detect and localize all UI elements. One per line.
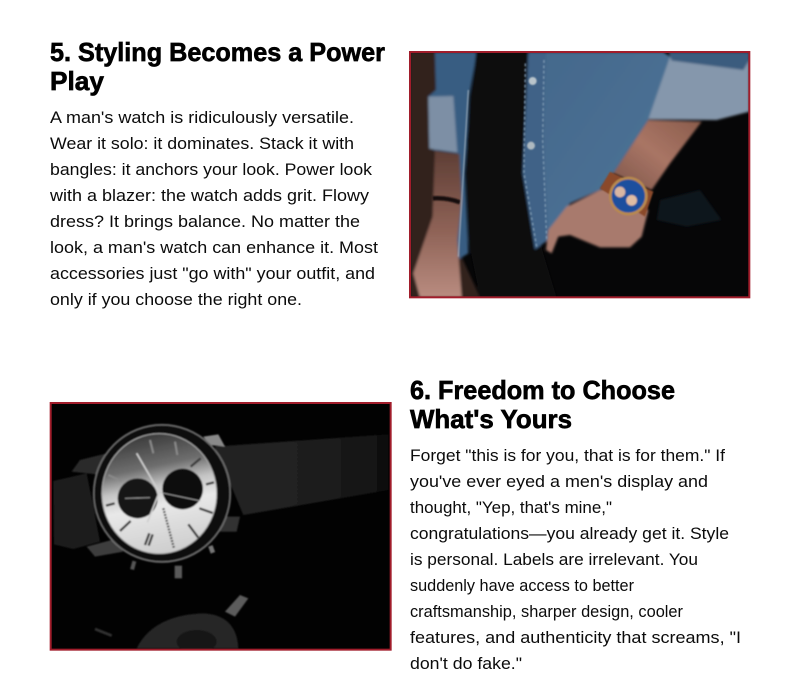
text block: section 6 body: don't do fake." [410, 655, 522, 673]
text block: section 6 body: is personal. Labels are irrelevant. You [410, 551, 698, 569]
text block: section 5 body: A man's watch is ridiculously versatile. [50, 109, 354, 127]
text block: section 6 body: you've ever eyed a men's display and [410, 473, 708, 491]
red frame [51, 403, 391, 650]
text block: section 6 body: suddenly have access to better [410, 577, 634, 595]
text block: section 6 body: craftsmanship, sharper design, cooler [410, 603, 683, 621]
red frame [410, 52, 749, 297]
text block: section 5 body: only if you choose the right one. [50, 291, 302, 309]
photo: man in denim shirt wearing a blue-dial watch [410, 52, 749, 297]
text block: section 5 body: look, a man's watch can enhance it. Most [50, 239, 378, 257]
text block: section 5 body [49, 109, 378, 309]
heading: section 6: 6. Freedom to Choose [410, 375, 675, 405]
text block: section 5 body: accessories just "go with" your outfit, and [50, 265, 375, 283]
heading: section 6: What's Yours [410, 404, 572, 434]
text block: section 5 body: with a blazer: the watch adds grit. Flowy [49, 187, 370, 205]
text block: section 6 body [410, 447, 741, 673]
photo: black and silver chronograph watch on black background [51, 403, 391, 653]
heading: section 6 [410, 375, 675, 434]
text block: section 6 body: thought, "Yep, that's mine," [410, 499, 612, 517]
text block: section 6 body: features, and authenticity that screams, "I [410, 629, 741, 647]
text block: section 5 body: dress? It brings balance. No matter the [50, 213, 360, 231]
text block: section 6 body: congratulations—you already get it. Style [410, 525, 729, 543]
heading: section 5: Play [50, 66, 105, 96]
heading: section 5 [50, 37, 385, 96]
heading: section 5: 5. Styling Becomes a Power [50, 37, 385, 67]
text block: section 5 body: Wear it solo: it dominates. Stack it with [50, 135, 354, 153]
text block: section 5 body: bangles: it anchors your look. Power look [50, 161, 373, 179]
text block: section 6 body: Forget "this is for you, that is for them." If [410, 447, 725, 465]
